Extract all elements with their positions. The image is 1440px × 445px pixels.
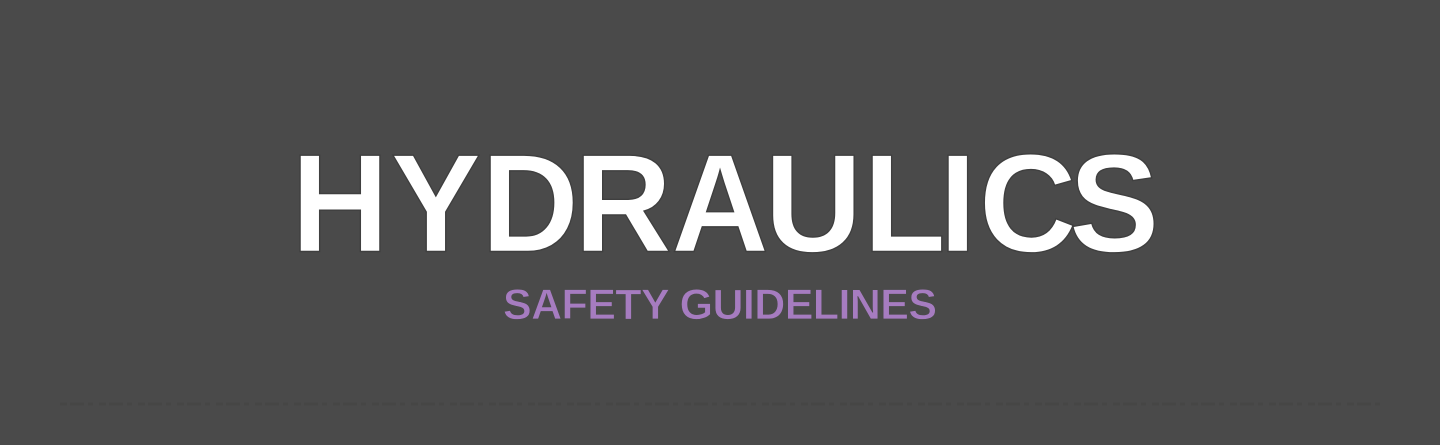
subtitle: SAFETY GUIDELINES: [503, 281, 937, 329]
faint footer trace: [60, 402, 1385, 406]
title: HYDRAULICS: [291, 126, 1160, 282]
